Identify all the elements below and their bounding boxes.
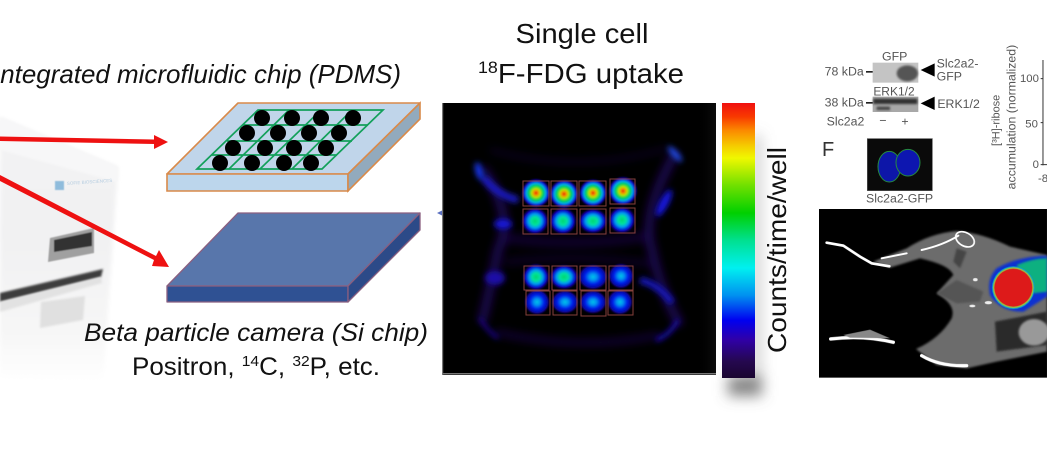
small marker (437, 210, 443, 216)
blot arrowheads (921, 63, 935, 77)
blot labels: Slc2a2- (937, 56, 978, 70)
cell micrograph (867, 139, 932, 191)
ribose axis labels: [³H]-ribose (990, 95, 1002, 146)
label: isotopes: P, etc. (310, 353, 380, 381)
blot labels: − (879, 114, 887, 128)
ribose axis labels: accumulation (normalized) (1004, 45, 1018, 189)
instrument display (48, 228, 94, 262)
blot labels (825, 50, 980, 128)
heading: single cell: Single cell (516, 18, 648, 49)
well signals (521, 176, 638, 315)
colour bar shadow (728, 135, 762, 396)
instrument photo (0, 117, 118, 383)
axis label: counts/time/well: Counts/time/well (762, 147, 792, 353)
arrow: to beta camera (0, 175, 169, 267)
ribose axis labels: 100 (1020, 73, 1039, 85)
corner streaks (473, 145, 684, 340)
body tissue (873, 231, 1047, 368)
CT scan panel (819, 209, 1047, 378)
label: isotopes: 14 (242, 353, 259, 370)
blot labels: + (901, 114, 909, 128)
ribose axis labels: 0 (1033, 159, 1039, 171)
label: isotopes: 32 (292, 353, 310, 370)
heading: integrated microfluidic chip: Integrated microfluidic chip (PDMS) (0, 59, 401, 89)
blot labels: GFP (937, 70, 962, 84)
beta particle camera chip (167, 213, 420, 302)
label: beta particle camera: Beta particle camera (Si chip) (84, 319, 428, 347)
bones (827, 229, 977, 366)
blot labels: ERK1/2 (873, 85, 915, 99)
well grid (197, 110, 383, 169)
blot labels: 78 kDa (825, 64, 864, 78)
microfluidic chip (167, 103, 420, 191)
ribose axis labels: 50 (1025, 118, 1038, 130)
blot labels: 38 kDa (825, 95, 864, 109)
chip outline glow (482, 148, 680, 343)
heading: FDG uptake: F-FDG uptake (498, 58, 684, 89)
blot labels: GFP (882, 50, 907, 64)
blot labels: ERK1/2 (937, 97, 980, 111)
ROI boxes (523, 179, 635, 316)
arrow: to microfluidic chip (0, 135, 168, 149)
heading: FDG uptake: 18 (478, 58, 498, 77)
blot bands (873, 63, 918, 112)
ribose axis labels (990, 45, 1047, 189)
instrument logo (55, 178, 112, 190)
wells (212, 110, 361, 171)
tracer uptake (989, 256, 1047, 312)
panel letter F: F (822, 139, 834, 161)
western blot panel: Slc2a2-GFP (866, 192, 933, 206)
colour bar (722, 103, 755, 378)
label: isotopes: C, (259, 353, 292, 381)
western blot panel (822, 45, 1047, 206)
blot labels: Slc2a2 (827, 114, 865, 128)
label: isotopes: Positron, (132, 353, 231, 381)
instrument logo: SOFIE BIOSCIENCES (67, 178, 112, 186)
heat map image (442, 103, 716, 375)
